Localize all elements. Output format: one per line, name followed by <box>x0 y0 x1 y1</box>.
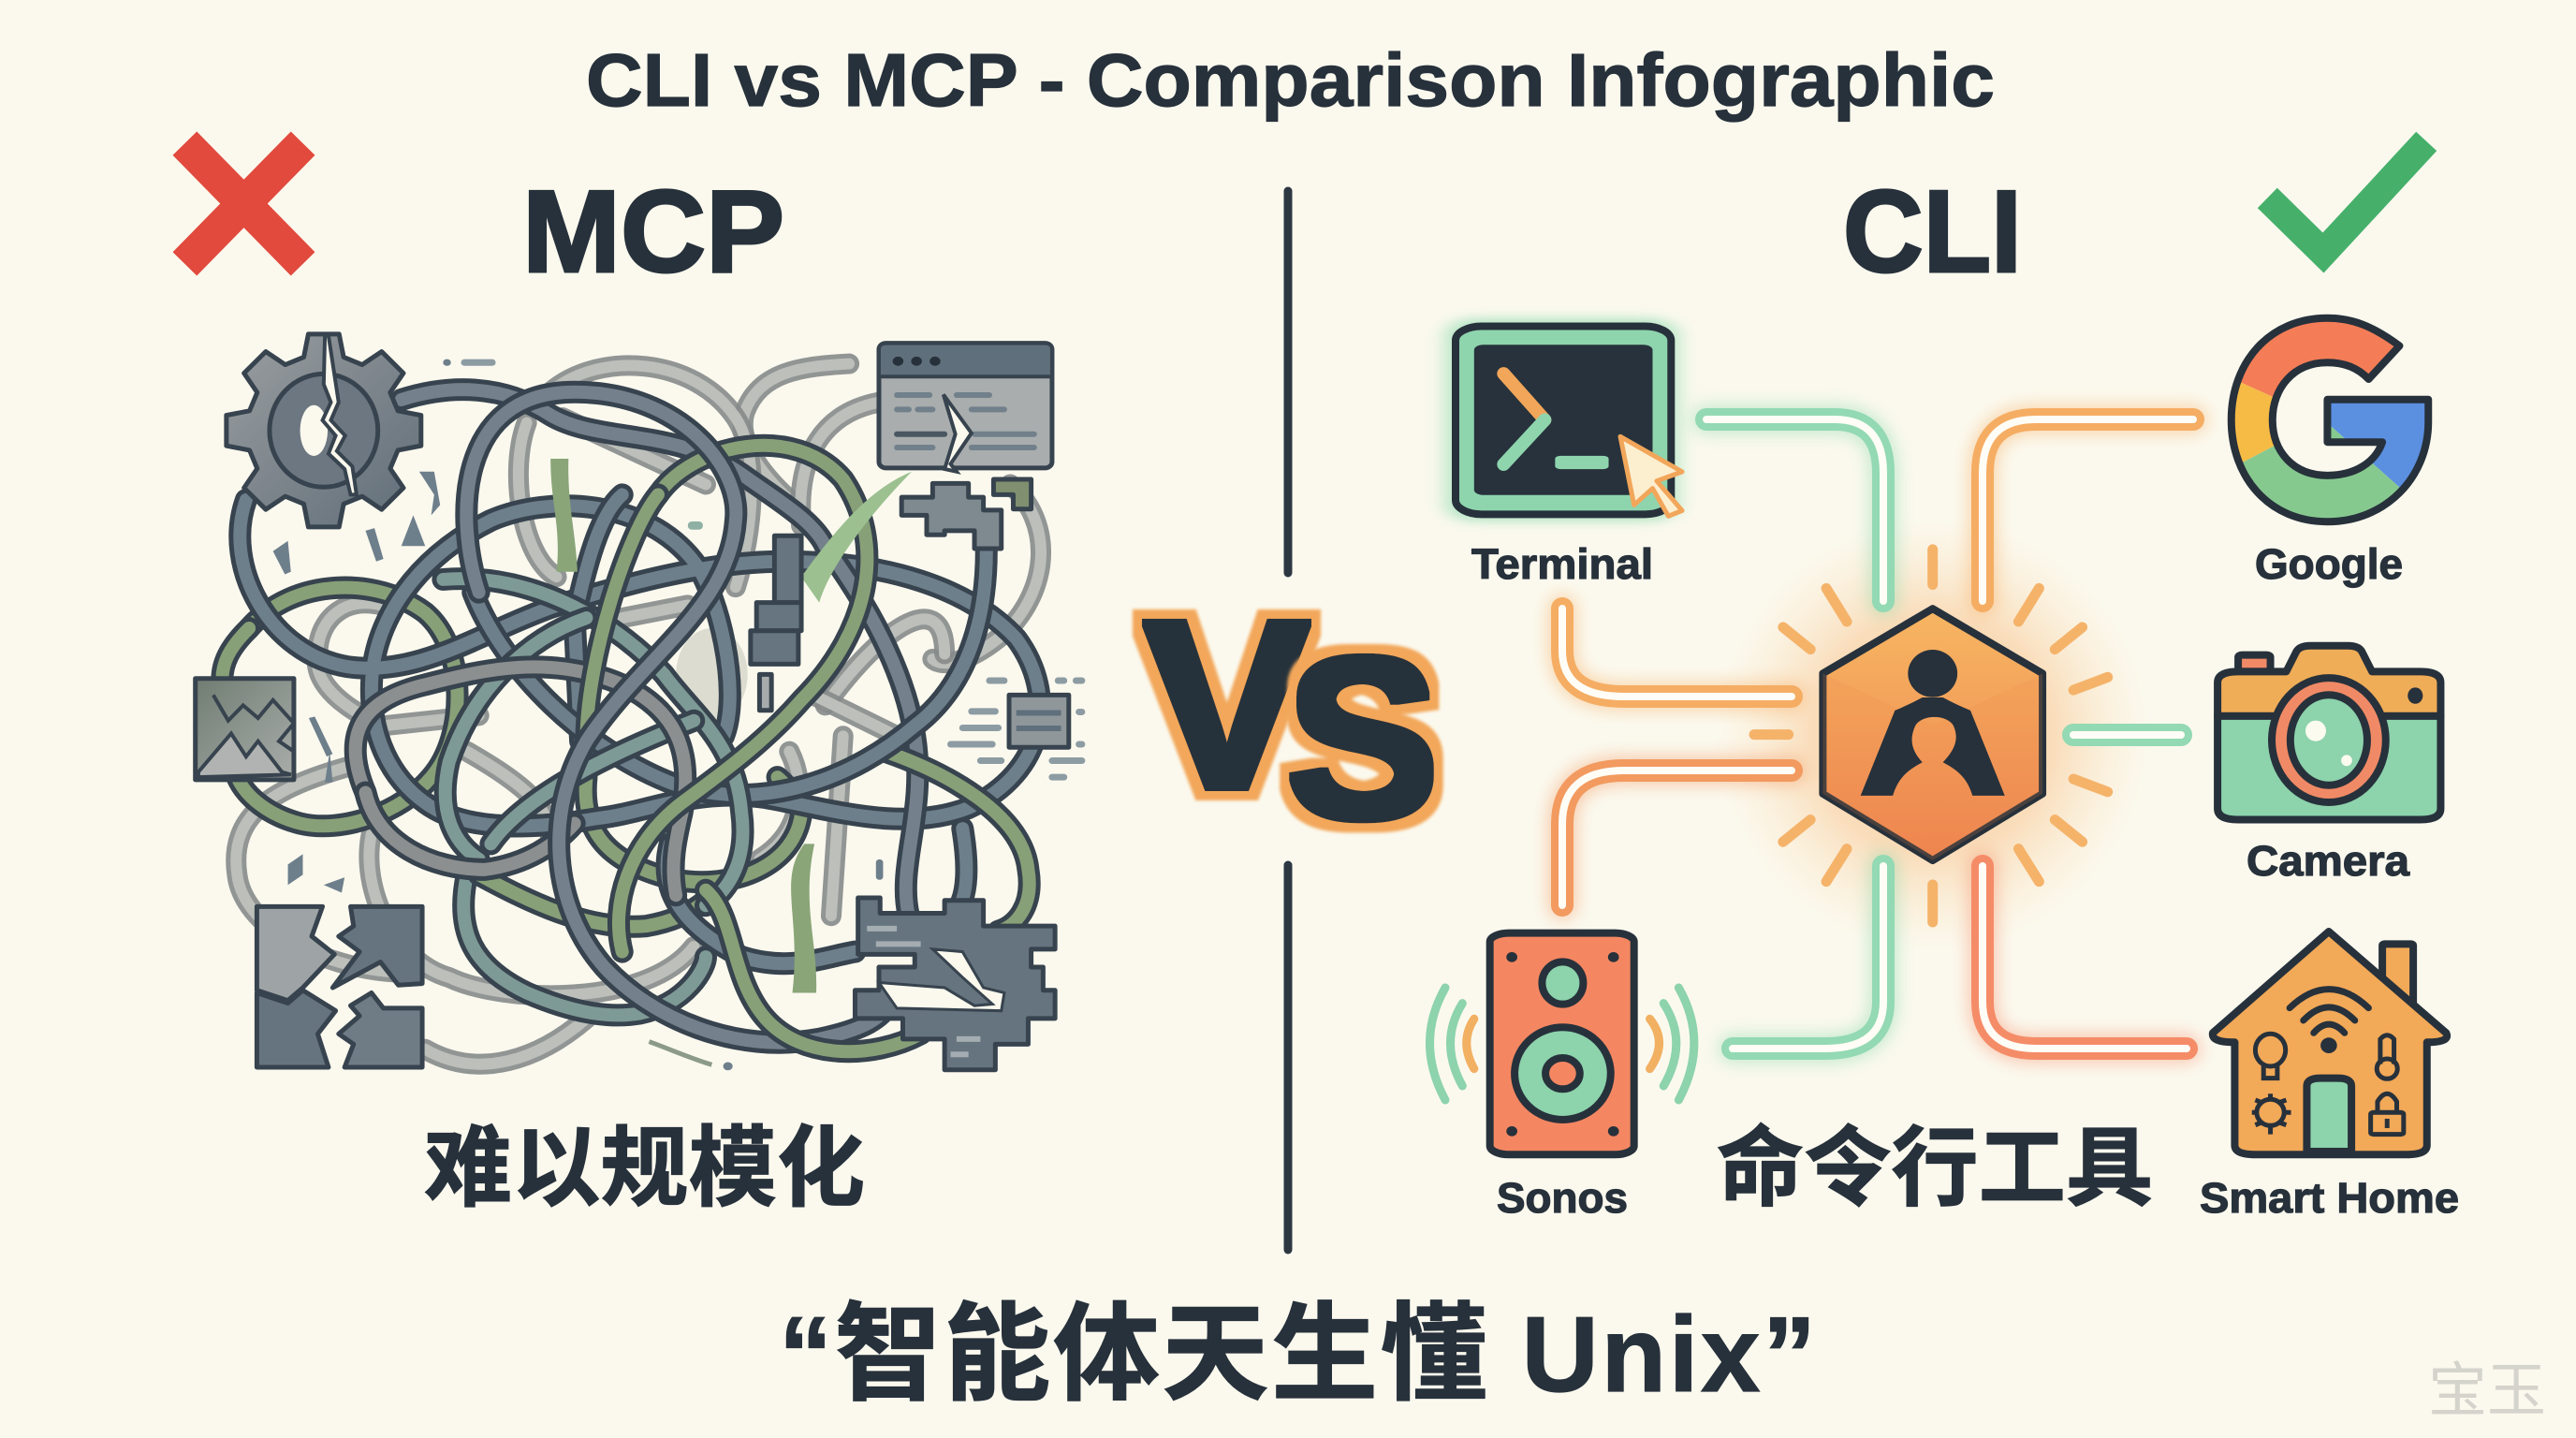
cursor arrow <box>1620 436 1682 516</box>
terminal screen <box>1474 345 1652 495</box>
flash dot <box>2408 687 2422 704</box>
title: CLI vs MCP - Comparison Infographic <box>586 38 1995 122</box>
center divider bottom <box>1284 865 1292 1250</box>
heading: command line tools: 命令行工具 <box>1717 1120 2153 1217</box>
hub glow <box>1713 515 2153 955</box>
icon: smart home <box>2213 932 2447 1154</box>
faded background cables <box>236 364 1041 1064</box>
connector: hub to sonos bottom <box>1733 866 1883 1049</box>
torn green cable pieces <box>550 459 912 992</box>
label: Smart Home: Smart Home <box>2200 1174 2459 1222</box>
label: Camera: Camera <box>2247 837 2410 885</box>
facets <box>1822 673 2042 860</box>
icon: speaker <box>1430 933 1694 1154</box>
icon: camera <box>2217 646 2440 820</box>
icon: connector with speed dashes <box>951 681 1082 777</box>
icon: broken picture <box>196 679 294 780</box>
speaker body <box>1490 933 1634 1154</box>
icon: pixel glitch top right <box>901 479 1032 549</box>
connector: hub to terminal left <box>1562 609 1792 697</box>
woofer <box>1515 1027 1611 1120</box>
terminal glow <box>1445 318 1678 521</box>
hexagon <box>1822 609 2042 860</box>
heading: MCP: MCP <box>522 168 784 297</box>
connector: hub to sonos <box>1562 770 1792 905</box>
connector: terminal to hub <box>1706 419 1883 601</box>
icon: red cross <box>197 155 291 252</box>
center divider top <box>1284 191 1292 573</box>
underscore <box>1555 456 1609 469</box>
connector: google to hub <box>1983 419 2193 601</box>
agent body <box>1861 697 2005 796</box>
sound waves <box>1430 988 1694 1100</box>
wifi <box>2290 990 2368 1033</box>
lock <box>2371 1093 2404 1135</box>
heading: hard to scale: 难以规模化 <box>424 1119 865 1217</box>
panel: MCP tangled cables <box>196 334 1082 1070</box>
icon: Google G <box>2221 315 2434 529</box>
icon: glitched block bottom right <box>855 898 1055 1070</box>
label: Sonos: Sonos <box>1497 1174 1628 1222</box>
lens <box>2272 678 2386 802</box>
sun sensor <box>2252 1093 2291 1135</box>
scattered fragments <box>273 360 883 1070</box>
bottom quote: “智能体天生懂 Unix” <box>779 1296 1816 1415</box>
connector: hub to camera <box>2073 721 2181 749</box>
terminal frame <box>1456 326 1671 514</box>
camera body <box>2217 646 2440 716</box>
icon: shattered block bottom left <box>256 906 422 1067</box>
icon: terminal <box>1445 318 1682 521</box>
agent head <box>1908 650 1957 697</box>
chimney <box>2382 944 2413 1019</box>
broken plug connector <box>751 536 801 711</box>
VS badge <box>1144 571 1439 866</box>
pale centre smudge <box>676 628 748 721</box>
tweeter <box>1542 961 1583 1005</box>
watermark: 宝玉 <box>2428 1358 2546 1424</box>
door <box>2306 1078 2351 1152</box>
icon: broken browser window <box>879 344 1052 472</box>
label: Google: Google <box>2255 540 2403 588</box>
icon: hexagon agent hub <box>1822 609 2042 860</box>
hub rays <box>1754 550 2108 922</box>
screws <box>1506 952 1619 1137</box>
VS badge: V <box>1144 571 1310 839</box>
VS badge: S <box>1286 609 1439 866</box>
connector: hub to smart home <box>1983 866 2187 1049</box>
label: Terminal: Terminal <box>1471 540 1653 588</box>
bulb <box>2255 1034 2286 1078</box>
prompt chevron <box>1503 374 1544 464</box>
shutter button <box>2238 655 2271 671</box>
heading: CLI: CLI <box>1843 168 2022 297</box>
house <box>2213 932 2447 1154</box>
thermometer <box>2377 1035 2397 1078</box>
main tangled cables <box>222 389 1040 1051</box>
icon: broken gear <box>227 334 421 527</box>
icon: green check <box>2277 152 2417 253</box>
